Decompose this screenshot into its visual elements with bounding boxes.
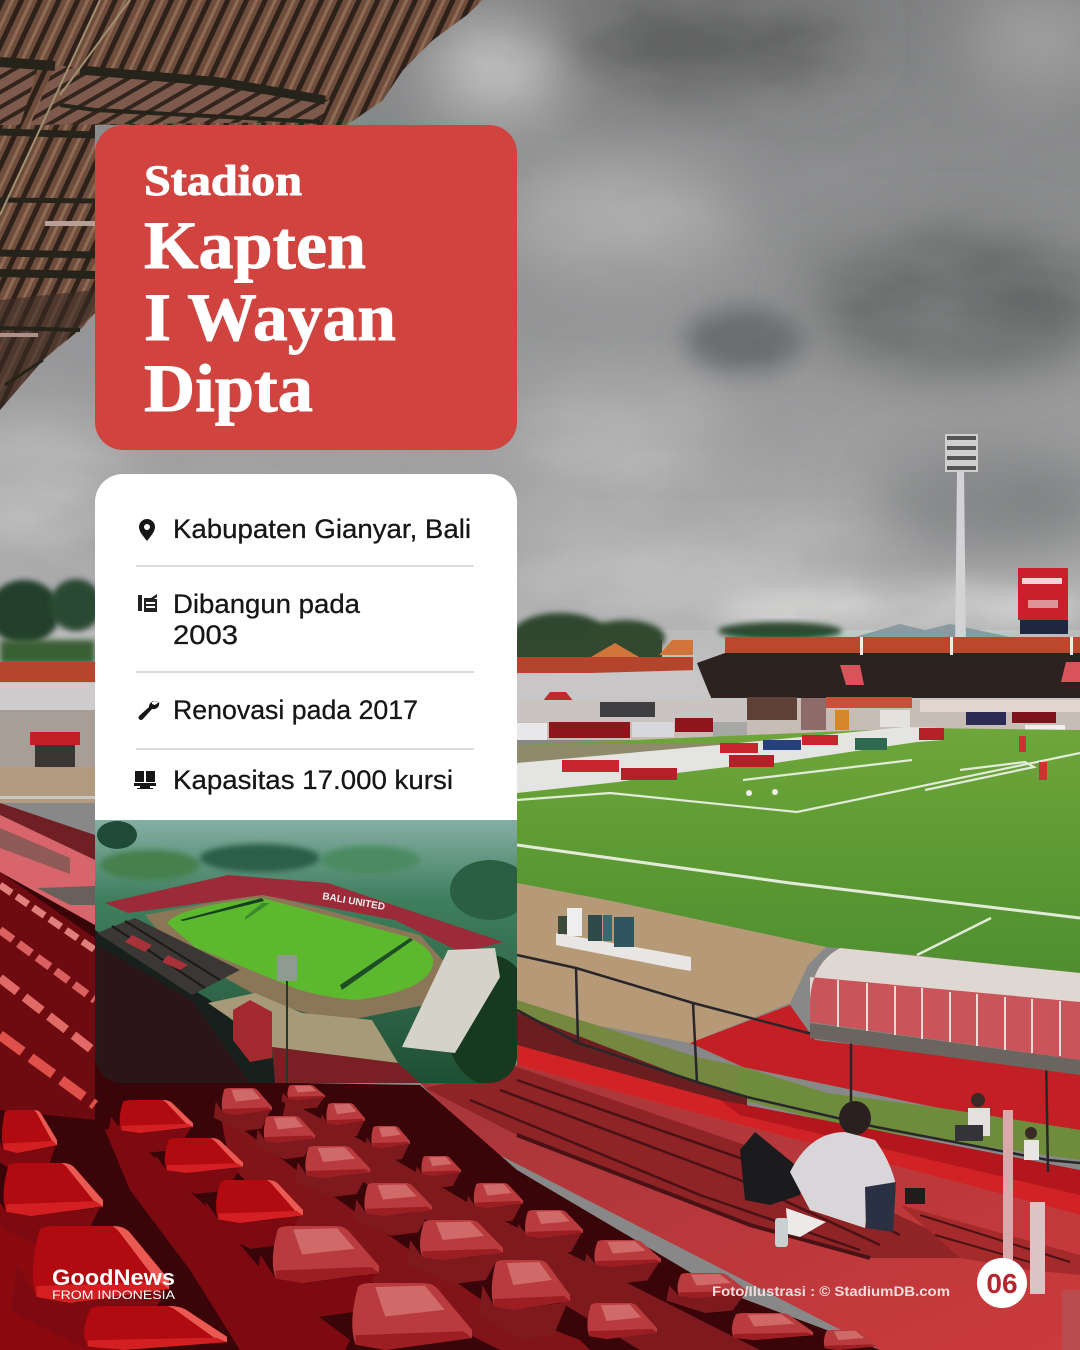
- running track: [517, 883, 826, 1043]
- title line: Kapten: Kapten: [144, 207, 366, 283]
- logo: GoodNews from Indonesia: FROM INDONESIA: [52, 1288, 175, 1302]
- renovation text: Renovasi pada 2017: [173, 695, 418, 725]
- red concourse floor: [420, 1065, 1080, 1350]
- left side red steps: [0, 815, 95, 925]
- spectators and railing posts: [955, 1093, 1080, 1350]
- white shirt: [790, 1132, 896, 1228]
- seated spectator: [740, 1101, 925, 1247]
- plastic bag: [786, 1208, 826, 1237]
- aerial: dark covered stand: [97, 918, 250, 1083]
- built year value: 2003: [173, 620, 238, 650]
- panel: title card: [95, 125, 517, 450]
- page number badge: 06: [986, 1268, 1018, 1299]
- water bottle: [775, 1218, 788, 1247]
- aerial: south stand: [208, 993, 398, 1063]
- icon: building construction: [138, 594, 157, 612]
- title line: Dipta: Dipta: [144, 350, 313, 426]
- players bench with team: [556, 908, 691, 971]
- advertising boards: [517, 697, 1080, 740]
- dark seating base: [0, 870, 880, 1350]
- icon: location pin: [139, 519, 155, 541]
- lower red area and fence: [517, 955, 1080, 1215]
- logo: GoodNews from Indonesia: GoodNews: [52, 1265, 175, 1290]
- sky with clouds: [0, 0, 1080, 720]
- title line: Stadion: Stadion: [144, 158, 302, 205]
- aerial stadium photo: [95, 820, 535, 1085]
- aerial: pitch: [167, 898, 433, 1000]
- photo credit: Foto/Ilustrasi : © StadiumDB.com: [712, 1283, 950, 1299]
- page number badge: [977, 1258, 1027, 1308]
- floodlight tower: [945, 434, 978, 650]
- distant seat rows on left: [0, 872, 95, 1120]
- scoreboard: [1018, 568, 1068, 634]
- icon: wrench: [138, 701, 159, 720]
- location text: Kabupaten Gianyar, Bali: [173, 514, 471, 544]
- capacity text: Kapasitas 17.000 kursi: [173, 765, 453, 795]
- built year text: Dibangun pada: [173, 589, 361, 619]
- head: [839, 1101, 871, 1135]
- aerial: track: [145, 893, 447, 1022]
- aerial: red stand with BALI UNITED text: [105, 875, 503, 953]
- logo: GoodNews from Indonesia: [52, 1265, 175, 1302]
- far tree line and palms: [0, 579, 1010, 664]
- aerial: red stand with BALI UNITED text: BALI UNITED: [321, 891, 386, 913]
- team dugout: [810, 948, 1080, 1075]
- title line: I Wayan: I Wayan: [144, 279, 396, 355]
- aerial: gate tower: [233, 1000, 272, 1062]
- roof canopy: [0, 0, 483, 410]
- aerial: white stand: [402, 948, 500, 1053]
- long wooden bench: [425, 1067, 1080, 1275]
- aerial: floodlight: [277, 955, 297, 1083]
- grandstands: [0, 637, 1080, 860]
- jacket on bench: [740, 1132, 804, 1205]
- jeans: [865, 1182, 896, 1232]
- icon: seats: [134, 771, 156, 789]
- red seats rows: [0, 1085, 876, 1350]
- seat row backs: [0, 1100, 760, 1350]
- panel: stadium facts: [95, 474, 517, 822]
- football pitch: [517, 727, 1080, 975]
